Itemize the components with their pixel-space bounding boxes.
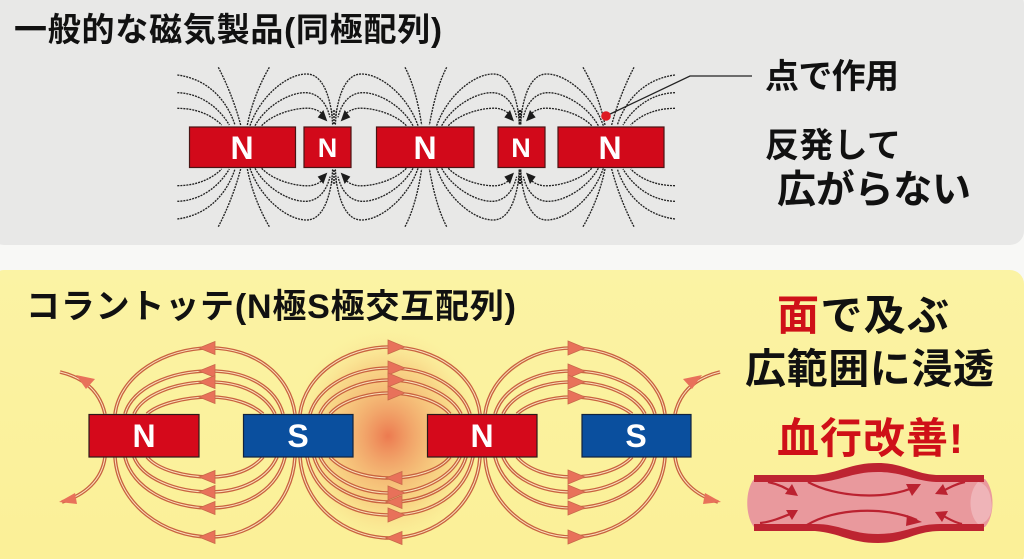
magnet row: five N magnets [190, 127, 664, 168]
panel: ordinary magnetic products [0, 0, 1024, 245]
vessel lower wall [754, 524, 984, 543]
label: penetrates a wide area: 広範囲に浸透 [745, 346, 994, 392]
vessel opening [970, 482, 992, 524]
dotted magnetic field lines [177, 67, 675, 227]
magnet N 3: N [413, 130, 437, 166]
magnet S right [582, 414, 691, 457]
label: improves blood circulation: 血行改善! [777, 415, 963, 462]
magnet N 4: N [511, 133, 531, 163]
magnet N right [428, 414, 537, 457]
label: acts at a point: 点で作用 [765, 58, 899, 96]
label: reaches across a surface: 面で及ぶ [777, 292, 949, 339]
magnet N 1: N [230, 130, 254, 166]
field direction arrowheads [59, 340, 721, 544]
label: repels and does not spread [765, 127, 971, 212]
blood flow arrows [760, 482, 965, 526]
magnet N 5: N [598, 130, 622, 166]
heading: ordinary magnets: 一般的な磁気製品(同極配列) [14, 11, 442, 48]
magnet S left [244, 414, 353, 457]
magnet row: alternating N and S [89, 414, 691, 457]
magnet N 4 [498, 127, 545, 168]
double-line magnetic field arcs [60, 347, 720, 538]
magnet N 1 [190, 127, 296, 168]
label: repels and does not spread: 広がらない [777, 169, 971, 212]
heading: Colantotte: コラントッテ(N極S極交互配列) [26, 288, 516, 326]
magnet N 2: N [318, 133, 337, 163]
central glow [288, 324, 488, 548]
magnet N right: N [470, 418, 494, 454]
magnet N 3 [376, 127, 474, 168]
vessel body [747, 469, 992, 537]
vessel upper wall [754, 463, 984, 482]
magnet N left [89, 414, 199, 457]
magnet N left: N [132, 418, 156, 454]
panel background: gray [0, 0, 1024, 245]
magnet N 2 [304, 127, 351, 168]
magnet S right: S [625, 418, 647, 454]
icon: blood vessel [747, 463, 992, 543]
magnet S left: S [287, 418, 309, 454]
magnet N 5 [558, 127, 664, 168]
leader line with red dot [601, 76, 752, 121]
panel: Colantotte alternating array [0, 270, 1024, 559]
label: repels and does not spread: 反発して [765, 127, 901, 165]
panel background: yellow [0, 270, 1024, 559]
